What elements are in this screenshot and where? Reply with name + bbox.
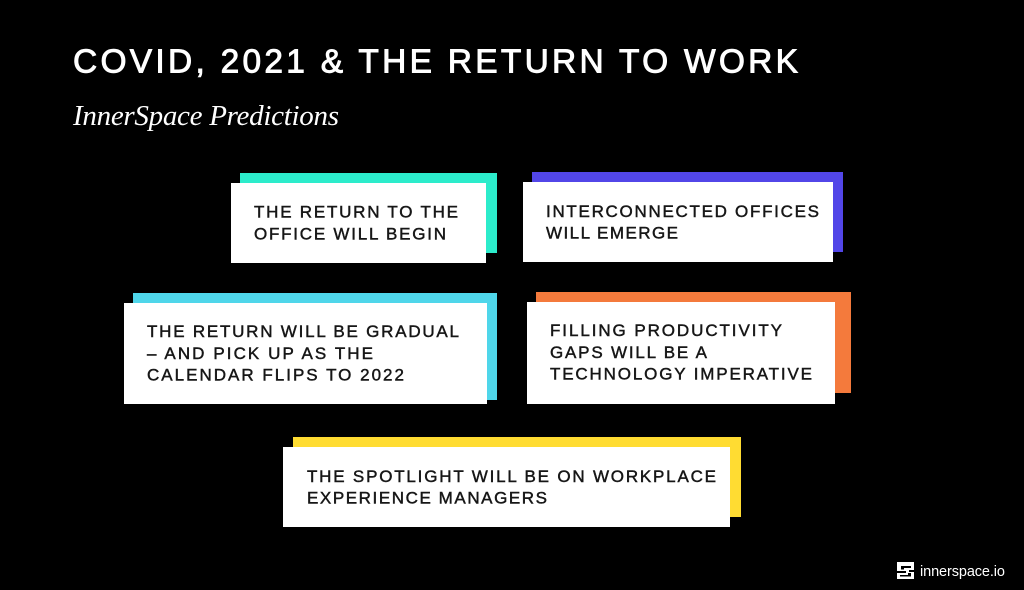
logo: innerspace.io bbox=[897, 562, 1005, 580]
panel: gradual return bbox=[124, 293, 497, 404]
panel: interconnected offices bbox=[523, 172, 843, 262]
panel: return to the office bbox=[231, 173, 497, 263]
panel: workplace experience managers bbox=[283, 437, 741, 527]
icon: innerspace mark bbox=[897, 562, 914, 579]
panel: workplace experience managers: EXPERIENCE MANAGERS bbox=[307, 488, 547, 508]
panel: productivity gaps: FILLING PRODUCTIVITY bbox=[550, 321, 782, 340]
panel: gradual return: THE RETURN WILL BE GRADUAL bbox=[147, 322, 459, 341]
panel: return to the office: OFFICE WILL BEGIN bbox=[254, 224, 446, 244]
brand text: innerspace.io bbox=[920, 564, 1005, 580]
title: COVID, 2021 & THE RETURN TO WORK bbox=[73, 44, 798, 80]
panel: productivity gaps: TECHNOLOGY IMPERATIVE bbox=[550, 364, 812, 384]
panel: interconnected offices: INTERCONNECTED OFFICES bbox=[546, 202, 819, 221]
panel: interconnected offices: WILL EMERGE bbox=[546, 224, 678, 242]
panel: gradual return: – AND PICK UP AS THE bbox=[147, 344, 373, 363]
subtitle: InnerSpace Predictions bbox=[72, 100, 339, 132]
panel: productivity gaps bbox=[527, 292, 851, 404]
panel: workplace experience managers: THE SPOTLIGHT WILL BE ON WORKPLACE bbox=[307, 467, 716, 486]
panel: gradual return: CALENDAR FLIPS TO 2022 bbox=[147, 366, 404, 384]
panel: productivity gaps: GAPS WILL BE A bbox=[550, 343, 708, 362]
panel: return to the office: THE RETURN TO THE bbox=[254, 202, 458, 222]
